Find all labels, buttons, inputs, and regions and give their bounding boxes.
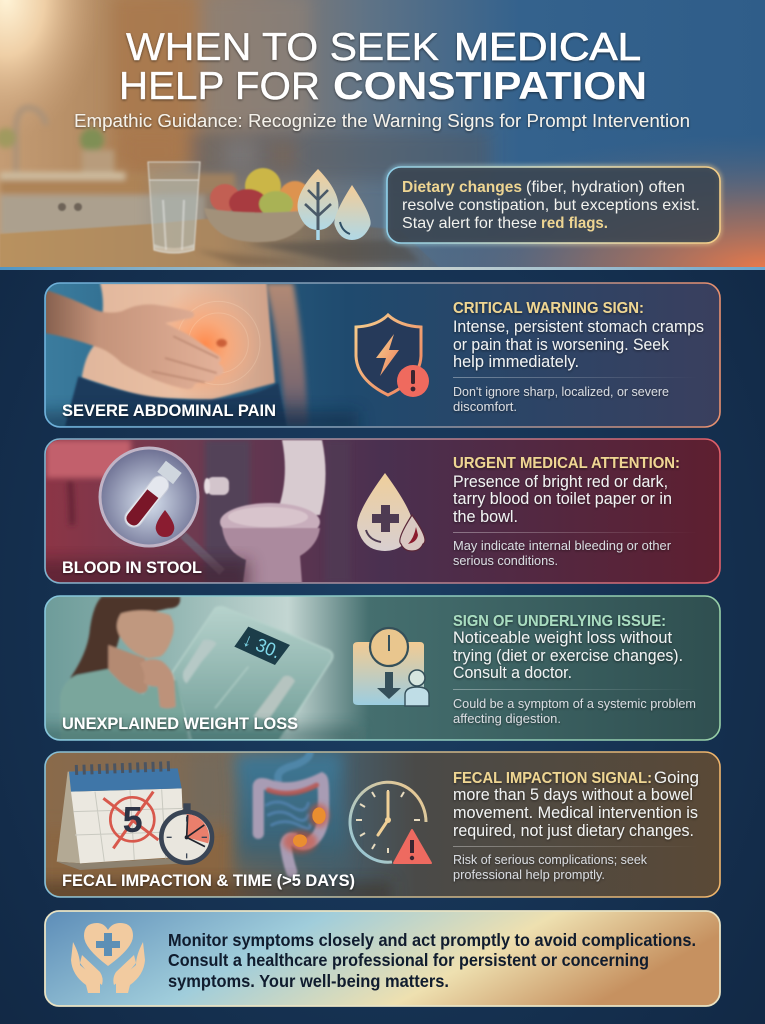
text block bbox=[453, 300, 704, 414]
photo: woman and scale bbox=[46, 597, 361, 739]
hero divider bbox=[0, 267, 765, 270]
footer text bbox=[168, 930, 696, 991]
text block: Consult a doctor. bbox=[453, 664, 572, 682]
callout: dietary changes: Stay alert for these bbox=[402, 215, 537, 232]
photo: calendar, clock and colon bbox=[25, 753, 392, 908]
text block bbox=[453, 613, 696, 726]
icon: glass of water bbox=[148, 162, 200, 253]
callout: dietary changes: Dietary changes bbox=[402, 179, 522, 196]
text block: affecting digestion. bbox=[453, 711, 561, 726]
text block: professional help promptly. bbox=[453, 867, 605, 882]
bathroom scale bbox=[172, 607, 333, 742]
text block: the bowl. bbox=[453, 508, 518, 526]
text block: Could be a symptom of a systemic problem bbox=[453, 696, 696, 711]
label: BLOOD IN STOOL bbox=[62, 559, 202, 577]
woman bbox=[60, 597, 188, 745]
text block: movement. Medical intervention is bbox=[453, 804, 698, 822]
callout: dietary changes: red flags. bbox=[541, 215, 608, 232]
subtitle: Empathic Guidance: Recognize the Warning Signs for Prompt Intervention bbox=[74, 111, 690, 131]
callout: dietary changes bbox=[387, 167, 720, 243]
title: MEDICAL bbox=[454, 26, 641, 69]
text block: help immediately. bbox=[453, 353, 579, 371]
footer text: Consult a healthcare professional for persistent or concerning bbox=[168, 950, 649, 970]
callout: dietary changes: resolve constipation, but exceptions exist. bbox=[402, 197, 700, 214]
label: FECAL IMPACTION & TIME (>5 DAYS) bbox=[62, 872, 355, 890]
photo: calendar, clock and colon: 5 bbox=[123, 799, 143, 840]
calendar bbox=[57, 772, 82, 863]
label: SEVERE ABDOMINAL PAIN bbox=[62, 402, 276, 420]
text block: CRITICAL WARNING SIGN: bbox=[453, 300, 644, 317]
text block: Going bbox=[654, 769, 699, 787]
text block: May indicate internal bleeding or other bbox=[453, 538, 672, 553]
icon: hands holding heart bbox=[71, 923, 145, 993]
callout: dietary changes: (fiber, hydration) often bbox=[526, 179, 685, 196]
text block: Don't ignore sharp, localized, or severe bbox=[453, 384, 669, 399]
photo: toilet and magnifier bbox=[46, 440, 327, 582]
title bbox=[119, 26, 647, 108]
icon: clock with warning bbox=[350, 782, 431, 863]
colon bbox=[258, 753, 324, 872]
icon: blood drop with cross bbox=[357, 473, 425, 551]
text block: more than 5 days without a bowel bbox=[453, 786, 693, 804]
footer callout bbox=[45, 911, 720, 1006]
icon: scale with arrow and person bbox=[353, 628, 429, 706]
panel: fecal impaction and time bbox=[25, 752, 720, 908]
title: WHEN TO SEEK bbox=[126, 26, 439, 69]
label: UNEXPLAINED WEIGHT LOSS bbox=[62, 715, 298, 733]
text block: tarry blood on toilet paper or in bbox=[453, 490, 672, 508]
icon: shield with alert bbox=[356, 315, 429, 397]
text block: Presence of bright red or dark, bbox=[453, 473, 668, 491]
panel: severe abdominal pain bbox=[25, 283, 720, 438]
photo: hand on abdomen bbox=[46, 284, 361, 426]
text block: FECAL IMPACTION SIGNAL: bbox=[453, 770, 652, 787]
text block: serious conditions. bbox=[453, 553, 558, 568]
title: CONSTIPATION bbox=[333, 65, 647, 108]
text block bbox=[453, 769, 699, 882]
text block: required, not just dietary changes. bbox=[453, 822, 694, 840]
text block: Noticeable weight loss without bbox=[453, 629, 672, 647]
text block: SIGN OF UNDERLYING ISSUE: bbox=[453, 613, 666, 630]
text block: Risk of serious complications; seek bbox=[453, 852, 647, 867]
photo: woman and scale: ↓ 30. bbox=[240, 629, 284, 662]
text block: trying (diet or exercise changes). bbox=[453, 647, 683, 665]
fruit bowl bbox=[204, 168, 312, 242]
text block: Intense, persistent stomach cramps bbox=[453, 318, 704, 336]
text block: or pain that is worsening. Seek bbox=[453, 336, 670, 354]
text block: discomfort. bbox=[453, 399, 517, 414]
footer text: symptoms. Your well-being matters. bbox=[168, 971, 449, 991]
hero photo: kitchen scene bbox=[0, 0, 765, 268]
panel: blood in stool bbox=[30, 439, 720, 595]
title: HELP FOR bbox=[119, 65, 320, 108]
text block bbox=[453, 455, 680, 568]
magnifier bbox=[183, 535, 222, 572]
small clock bbox=[183, 803, 191, 811]
panel: unexplained weight loss bbox=[25, 596, 720, 750]
torso bbox=[232, 753, 347, 877]
text block: URGENT MEDICAL ATTENTION: bbox=[453, 455, 680, 472]
footer text: Monitor symptoms closely and act promptly to avoid complications. bbox=[168, 930, 696, 950]
icon: leaf and water drop bbox=[298, 169, 371, 240]
